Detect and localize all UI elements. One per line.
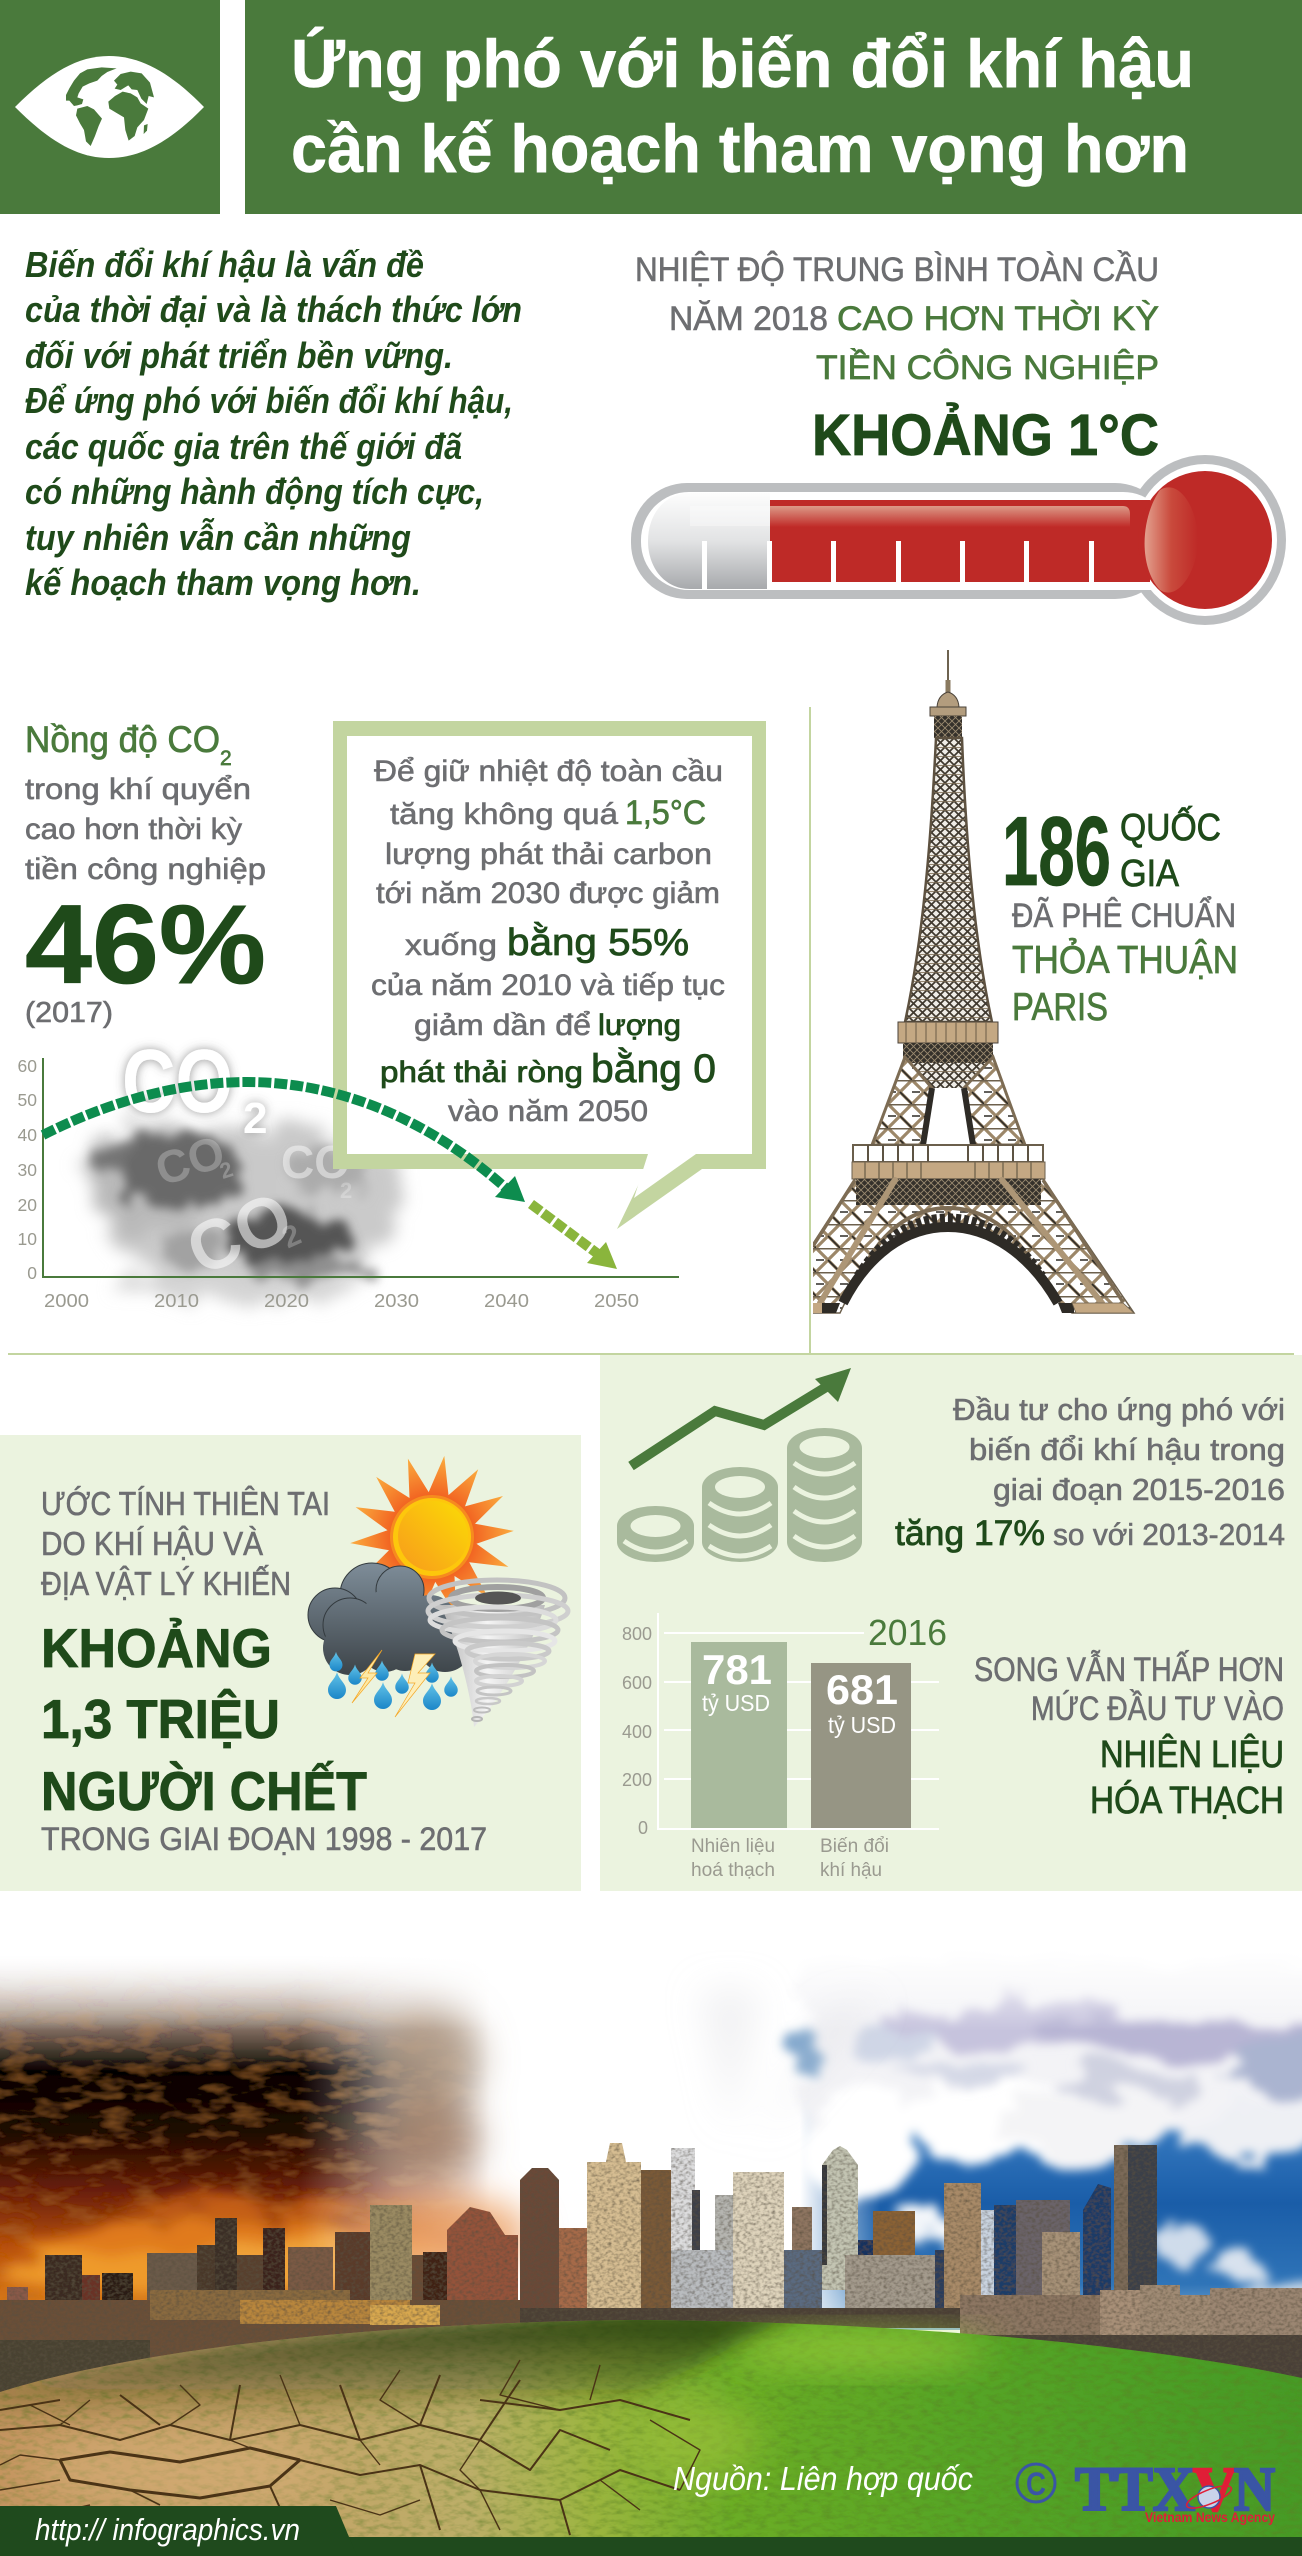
smoke cloud with CO2 lettering: CO xyxy=(122,1032,233,1132)
panel: CO2 concentration text: 46% xyxy=(25,882,266,1007)
bar: climate change: tỷ USD xyxy=(828,1712,896,1738)
bar chart: 2016 investment: 600 xyxy=(622,1673,652,1693)
first platform xyxy=(852,1145,1045,1179)
investment text: so với 2013-2014 xyxy=(1053,1517,1285,1552)
axes xyxy=(43,1058,679,1277)
temperature headline: TIỀN CÔNG NGHIỆP xyxy=(816,349,1159,387)
icon: coin stacks xyxy=(617,1428,862,1562)
earth cracks xyxy=(0,2360,700,2535)
smoke cloud with CO2 lettering: 2 xyxy=(243,1094,267,1143)
photo: city half burnt half green xyxy=(0,1968,1302,2537)
logo: TTXVN xyxy=(1017,2456,1275,2525)
temperature headline: CAO HƠN THỜI KỲ xyxy=(837,300,1159,338)
callout: emission targets: tăng không quá xyxy=(390,798,618,831)
Paris agreement text: GIA xyxy=(1120,853,1180,895)
icon: Eiffel tower xyxy=(813,650,1136,1314)
bar chart: 2016 investment: 800 xyxy=(622,1624,652,1644)
panel: CO2 concentration text: (2017) xyxy=(25,997,113,1029)
panel: investment xyxy=(600,1355,1302,1891)
callout: emission targets: của năm 2010 và tiếp tục xyxy=(371,969,725,1002)
bar chart: 2016 investment: 2016 xyxy=(868,1612,947,1653)
bar chart: 2016 investment: khí hậu xyxy=(820,1860,882,1881)
intro text block: đối với phát triển bền vững. xyxy=(25,335,453,376)
smoke cloud with CO2 lettering: CO xyxy=(176,1176,303,1290)
fossil fuel comparison text xyxy=(974,1651,1284,1822)
panel: disasters xyxy=(0,1435,581,1891)
panel: CO2 concentration text: trong khí quyển xyxy=(25,773,251,806)
investment text: Đầu tư cho ứng phó với xyxy=(953,1392,1285,1427)
callout: emission targets: giảm dần để xyxy=(414,1009,591,1042)
bar chart: 2016 investment: 400 xyxy=(622,1722,652,1742)
burnt sky xyxy=(0,1968,483,2300)
disaster text: NGƯỜI CHẾT xyxy=(41,1760,367,1822)
logo: TTXVN: Vietnam News Agency xyxy=(1145,2509,1275,2525)
intro text block: có những hành động tích cực, xyxy=(25,471,484,512)
intro text block xyxy=(25,244,522,603)
smoke cloud with CO2 lettering xyxy=(88,1032,405,1301)
title: cần kế hoạch tham vọng hơn xyxy=(291,111,1189,187)
arrow: emission curve to 2040 xyxy=(43,1082,525,1202)
disaster text xyxy=(41,1485,487,1857)
callout: emission targets: Để giữ nhiệt độ toàn cầu xyxy=(374,755,723,788)
x axis labels: 2010 xyxy=(154,1291,199,1311)
intro text block: các quốc gia trên thế giới đã xyxy=(25,426,462,467)
bar: fossil fuel xyxy=(691,1642,787,1828)
disaster text: 1,3 TRIỆU xyxy=(41,1688,280,1750)
title: Ứng phó với biến đổi khí hậu xyxy=(291,26,1194,102)
Paris agreement text: THỎA THUẬN xyxy=(1012,938,1238,982)
panel: CO2 concentration text: tiền công nghiệp xyxy=(25,853,266,886)
callout: emission targets: lượng xyxy=(598,1009,681,1042)
second platform xyxy=(898,1022,998,1088)
x axis labels xyxy=(44,1291,639,1311)
disaster text: ƯỚC TÍNH THIÊN TAI xyxy=(41,1485,330,1522)
arrow: net zero by 2050 xyxy=(531,1204,617,1269)
intro text block: Để ứng phó với biến đổi khí hậu, xyxy=(25,380,513,421)
bar chart: 2016 investment: Nhiên liệu xyxy=(691,1836,775,1857)
disaster text: ĐỊA VẬT LÝ KHIẾN xyxy=(41,1565,291,1602)
investment text: tăng 17% xyxy=(895,1514,1045,1553)
icon: thermometer xyxy=(631,455,1286,625)
header bar xyxy=(0,0,1302,214)
coin stack small xyxy=(617,1506,694,1562)
ground: cracked earth to grass xyxy=(0,2310,1302,2541)
intro text block: tuy nhiên vẫn cần những xyxy=(25,517,411,558)
smoke cloud with CO2 lettering: 2 xyxy=(277,1218,306,1255)
callout: emission targets: phát thải ròng xyxy=(380,1056,583,1089)
Paris agreement text: PARIS xyxy=(1012,986,1108,1029)
spire and cabin xyxy=(930,650,966,738)
temperature headline xyxy=(635,251,1159,468)
logo: TTXVN: N xyxy=(1234,2456,1275,2524)
footer bar xyxy=(0,2506,1302,2556)
disaster text: DO KHÍ HẬU VÀ xyxy=(41,1525,263,1562)
callout: emission targets: xuống xyxy=(405,929,497,962)
bar chart: 2016 investment: Biến đổi xyxy=(820,1836,889,1857)
chart: CO2 emissions trajectory xyxy=(18,1032,679,1311)
intro text block: của thời đại và là thách thức lớn xyxy=(25,289,522,330)
y axis labels: 20 xyxy=(18,1195,37,1215)
icon: tornado xyxy=(428,1580,568,1727)
skyline: intact buildings xyxy=(520,2143,1302,2390)
disaster text: KHOẢNG xyxy=(41,1617,272,1679)
icon: storm cloud xyxy=(308,1563,472,1675)
callout: emission targets xyxy=(333,721,766,1229)
logo: TTXVN: C xyxy=(1026,2466,1046,2502)
investment text: giai đoạn 2015-2016 xyxy=(993,1472,1285,1507)
icon: eye with globe xyxy=(15,56,204,158)
Paris agreement text xyxy=(1002,796,1238,1029)
disaster text: TRONG GIAI ĐOẠN 1998 - 2017 xyxy=(41,1821,487,1857)
callout: emission targets: vào năm 2050 xyxy=(448,1095,648,1128)
callout: emission targets: tới năm 2030 được giảm xyxy=(376,877,720,910)
middle legs xyxy=(872,1057,1025,1145)
y axis labels: 10 xyxy=(18,1229,37,1249)
logo: TTXVN: V xyxy=(1193,2456,1237,2524)
Paris agreement text: 186 xyxy=(1002,796,1111,906)
callout: emission targets: bằng 55% xyxy=(507,921,689,964)
bar chart: 2016 investment: hoá thạch xyxy=(691,1860,775,1881)
y axis labels: 50 xyxy=(18,1090,37,1110)
panel: CO2 concentration text: Nồng độ CO xyxy=(25,719,220,760)
smoke cloud with CO2 lettering: CO xyxy=(281,1136,350,1188)
bar chart: 2016 investment: 200 xyxy=(622,1770,652,1790)
x axis labels: 2040 xyxy=(484,1291,529,1311)
bar: fossil fuel: tỷ USD xyxy=(702,1690,770,1716)
arrow: rising trend xyxy=(631,1368,851,1466)
intro text block: kế hoạch tham vọng hơn. xyxy=(25,562,421,603)
bar chart: 2016 investment: 0 xyxy=(638,1818,648,1838)
orange glow toward centre xyxy=(350,2005,530,2275)
panel: CO2 concentration text: 2 xyxy=(220,747,232,770)
bar: climate change: 681 xyxy=(826,1666,898,1713)
source text: Nguồn: Liên hợp quốc xyxy=(673,2460,973,2497)
smoke cloud with CO2 lettering: 2 xyxy=(340,1178,352,1203)
callout: emission targets: 1,5°C xyxy=(625,794,706,832)
bar: fossil fuel: 781 xyxy=(702,1646,772,1693)
x axis labels: 2020 xyxy=(264,1291,309,1311)
y axis labels: 40 xyxy=(18,1125,37,1145)
intro text block: Biến đổi khí hậu là vấn đề xyxy=(25,244,424,285)
upper shaft xyxy=(905,738,992,1022)
y axis labels: 0 xyxy=(27,1263,37,1283)
skyline: burnt buildings xyxy=(0,2205,520,2400)
footer bar: http:// infographics.vn xyxy=(35,2512,300,2547)
x axis labels: 2050 xyxy=(594,1291,639,1311)
investment text xyxy=(895,1392,1285,1553)
icon: rain drops and lightning xyxy=(328,1650,458,1717)
icon: sun xyxy=(350,1456,514,1618)
divider lines xyxy=(8,707,1294,1354)
temperature headline: KHOẢNG 1°C xyxy=(812,403,1159,468)
smoke cloud with CO2 lettering: CO xyxy=(149,1125,231,1196)
x axis labels: 2030 xyxy=(374,1291,419,1311)
smoke cloud with CO2 lettering: 2 xyxy=(217,1156,236,1184)
title xyxy=(291,26,1194,187)
x axis labels: 2000 xyxy=(44,1291,89,1311)
y axis labels xyxy=(18,1056,37,1283)
investment text: biến đổi khí hậu trong xyxy=(969,1432,1285,1467)
temperature headline: NHIỆT ĐỘ TRUNG BÌNH TOÀN CẦU xyxy=(635,251,1159,289)
coin stack tall xyxy=(787,1428,862,1562)
temperature headline: NĂM 2018 xyxy=(669,300,828,338)
panel: CO2 concentration text: cao hơn thời kỳ xyxy=(25,813,242,846)
y axis labels: 60 xyxy=(18,1056,37,1076)
callout: emission targets: lượng phát thải carbon xyxy=(385,838,712,871)
coin stack medium xyxy=(702,1467,778,1562)
lower legs and arch xyxy=(768,1179,1134,1313)
y axis labels: 30 xyxy=(18,1160,37,1180)
bar chart: 2016 investment xyxy=(622,1612,947,1881)
bar: climate change xyxy=(811,1663,911,1828)
logo: TTXVN: TTX xyxy=(1075,2456,1195,2524)
blue sky and clouds xyxy=(0,1891,1302,2330)
panel: CO2 concentration text xyxy=(25,719,266,1029)
Paris agreement text: ĐÃ PHÊ CHUẨN xyxy=(1012,897,1236,935)
callout: emission targets: bằng 0 xyxy=(591,1046,716,1091)
Paris agreement text: QUỐC xyxy=(1120,804,1221,849)
